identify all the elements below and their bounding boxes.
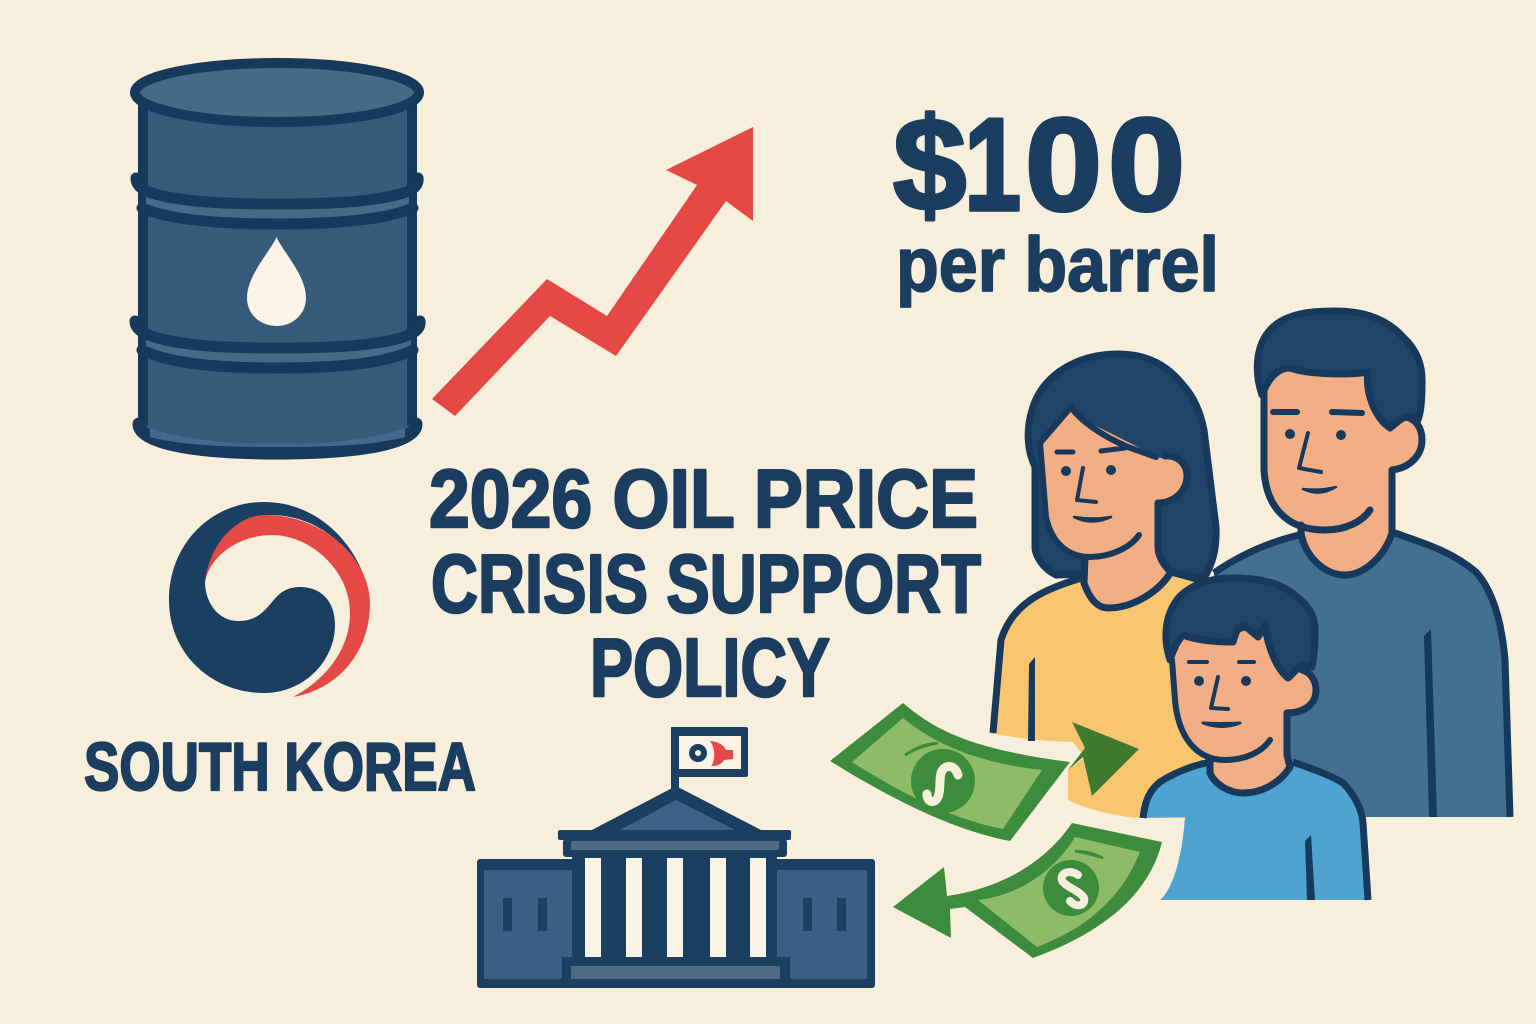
icon: dollar bill with arrow to government [893, 823, 1162, 958]
right wing [772, 859, 875, 988]
arrow head [893, 867, 965, 938]
price amount: 0 [1108, 90, 1185, 238]
icon: oil drop [247, 237, 306, 326]
title: POLICY [590, 621, 830, 714]
man [1200, 311, 1510, 817]
title: 2026 OIL PRICE [429, 452, 978, 545]
pediment [590, 786, 763, 831]
icon: dollar bill with arrow to family [830, 703, 1139, 841]
woman [990, 354, 1216, 818]
price amount: 0 [1025, 90, 1102, 238]
left wing [477, 859, 577, 988]
flag [671, 727, 748, 789]
arrow head [1068, 722, 1139, 796]
steps [562, 957, 790, 988]
text: price [893, 90, 1219, 308]
illustration: family [990, 311, 1510, 900]
price unit: per barrel [896, 222, 1219, 308]
price amount: $ [893, 91, 966, 238]
price amount [893, 90, 1185, 239]
icon: South Korea government emblem [169, 502, 370, 697]
text: South Korea label: SOUTH KOREA [84, 729, 476, 805]
title [429, 452, 981, 714]
icon: oil barrel [135, 63, 420, 455]
price amount: 1 [964, 92, 1021, 239]
title: CRISIS SUPPORT [431, 537, 981, 630]
icon: rising red arrow [432, 127, 753, 416]
icon: government building [477, 727, 875, 988]
columns [572, 855, 777, 959]
child [1143, 578, 1368, 900]
